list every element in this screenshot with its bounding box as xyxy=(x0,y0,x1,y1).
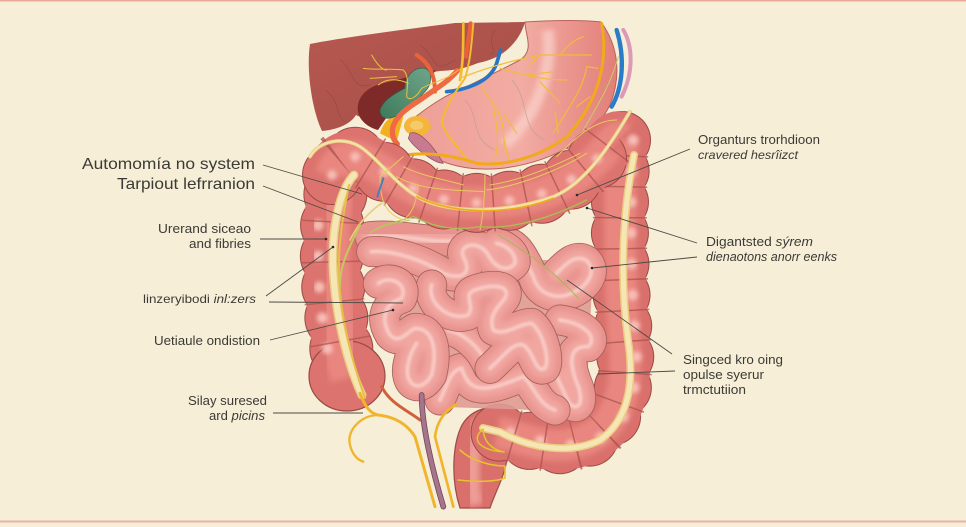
label: organ trophy: Organturs trorhdioon xyxy=(698,133,820,147)
label: inlizers: linzeryibodi inl:zers xyxy=(143,292,256,306)
nerves: bands on colon and mesentery xyxy=(310,112,630,240)
bottom border xyxy=(0,520,966,522)
label: singed impulse: opulse syerur xyxy=(683,367,765,382)
label: subheading: Tarpiout lefrranion xyxy=(117,176,255,193)
leader lines xyxy=(260,149,697,413)
label: digested system: dienaotons anorr eenks xyxy=(706,250,837,264)
loop: upper wave xyxy=(372,243,515,276)
descending colon and sigmoid xyxy=(454,140,636,508)
label: singed impulse: Singced kro oing xyxy=(683,352,783,367)
ascending colon xyxy=(309,165,385,411)
left labels xyxy=(82,156,267,423)
nerves: pelvic branches and vessel xyxy=(349,220,578,507)
small intestine loops xyxy=(370,236,593,410)
label: organ trophy: cravered hesrîizct xyxy=(698,148,799,162)
loop: right upper xyxy=(500,242,591,296)
label: digested system xyxy=(706,234,837,264)
label: digested system: Digantsted sýrem xyxy=(706,234,813,249)
stomach xyxy=(405,20,617,169)
loop: right lower xyxy=(557,320,591,407)
loop: left column xyxy=(378,280,434,386)
label: fibres xyxy=(158,222,251,251)
pancreas and duodenum detail xyxy=(380,115,443,163)
liver xyxy=(309,22,525,131)
label: singed impulse: trmctutiion xyxy=(683,382,746,397)
label: surfaced: Silay suresed xyxy=(188,394,267,408)
top border xyxy=(0,0,966,2)
nerves: descending band xyxy=(458,155,634,481)
transverse colon xyxy=(332,137,620,203)
nerves: ascending band xyxy=(333,175,365,398)
loop: upper band xyxy=(370,236,457,241)
label: distinction: Uetiaule ondistion xyxy=(154,334,260,348)
panel: anatomy illustration xyxy=(309,20,636,508)
label: autonomic heading: Automomía no system xyxy=(82,156,255,173)
leader end dots xyxy=(325,194,593,311)
gallbladder xyxy=(380,68,431,118)
loop: centre xyxy=(431,285,547,369)
great vessels at stomach xyxy=(363,23,631,164)
loop: connector xyxy=(448,330,488,367)
label: surfaced xyxy=(188,394,267,423)
label: singed impulse xyxy=(683,352,783,397)
label: surfaced: ard picins xyxy=(209,409,265,423)
right labels xyxy=(683,133,837,397)
loop: bottom xyxy=(440,368,555,410)
label: fibres: and fibries xyxy=(189,237,251,251)
label: fibres: Urerand siceao xyxy=(158,222,251,236)
label: organ trophy xyxy=(698,133,820,162)
